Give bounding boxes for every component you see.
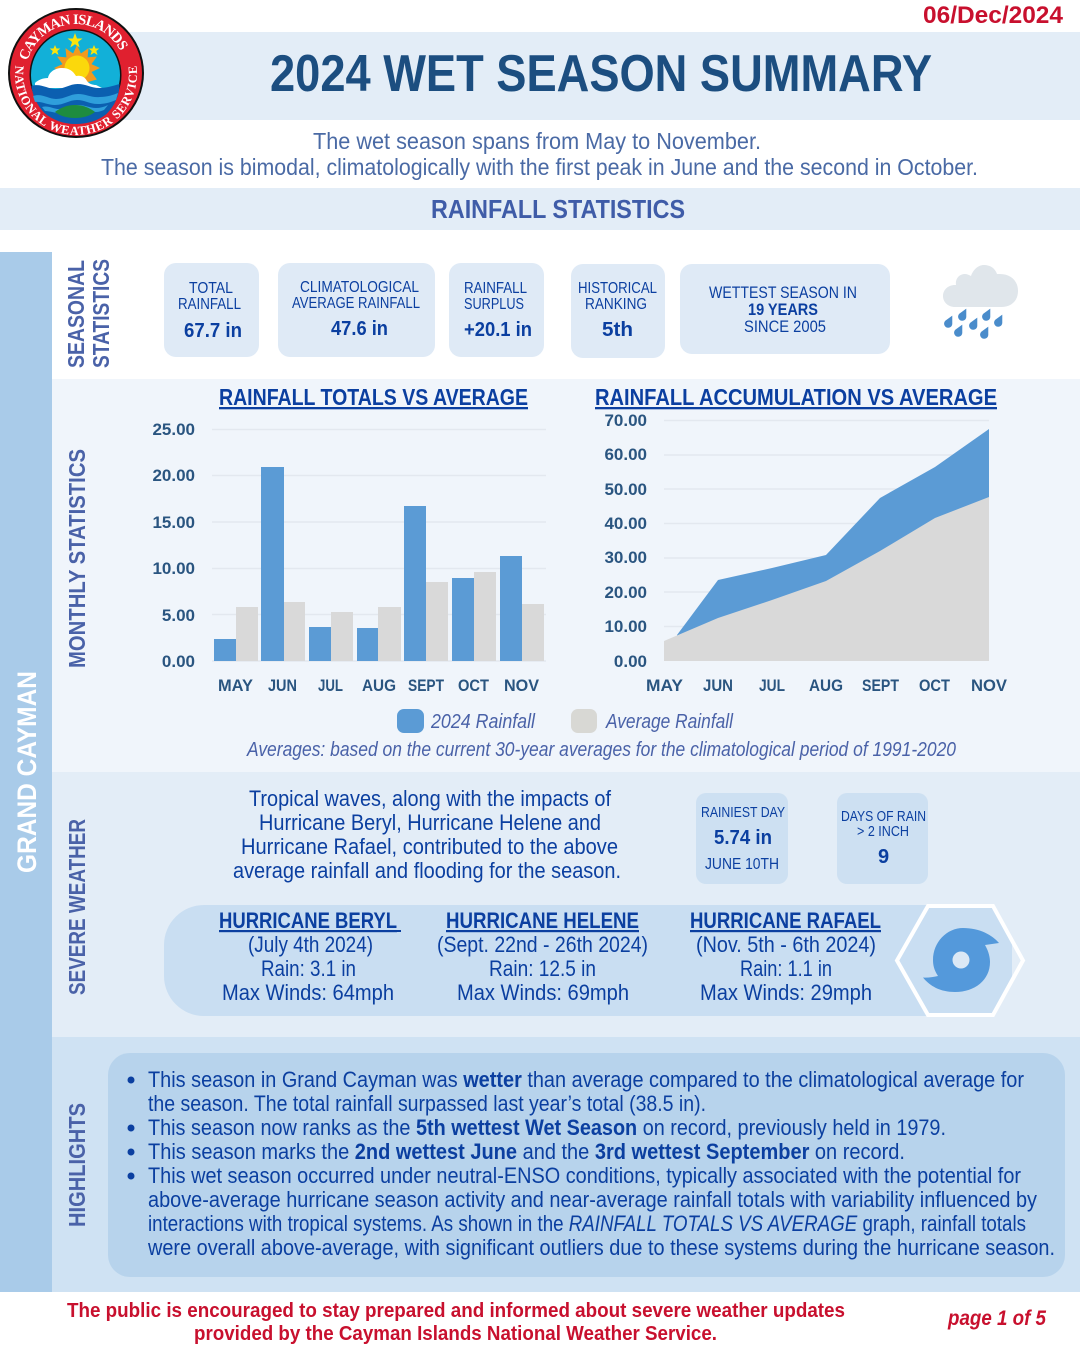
icon: national weather service logo: CAYMAN ISLANDS (20, 14, 128, 59)
severe weather description (233, 786, 621, 883)
card: days of rain: > 2 INCH (857, 824, 909, 840)
card: historical ranking: 5th (602, 319, 633, 341)
severe weather description: Tropical waves, along with the impacts of (249, 786, 612, 811)
sidebar: grand cayman (0, 252, 52, 1292)
severe weather description: Hurricane Beryl, Hurricane Helene and (259, 810, 601, 835)
highlight text: the season. The total rainfall surpassed last year’s total (38.5 in). (148, 1091, 706, 1116)
bar chart: rainfall totals vs average: AUG (362, 676, 396, 695)
area chart: rainfall accumulation vs average: 60.00 (604, 445, 647, 464)
sidebar: grand cayman: GRAND CAYMAN (12, 671, 42, 873)
card: rainiest day (696, 793, 788, 884)
card: climatological average: CLIMATOLOGICAL (300, 279, 419, 296)
hurricane helene: HURRICANE HELENE (446, 908, 639, 933)
hurricane rafael: HURRICANE RAFAEL (690, 908, 881, 933)
subtitle (101, 128, 978, 180)
hurricane beryl: (July 4th 2024) (248, 932, 373, 957)
card: days of rain: DAYS OF RAIN (841, 809, 926, 825)
legend: Average Rainfall (605, 711, 733, 733)
card: rainiest day: RAINIEST DAY (701, 805, 785, 821)
card: climatological average (278, 263, 435, 357)
hurricane rafael: Max Winds: 29mph (700, 980, 872, 1005)
icon: hurricane hexagon (897, 906, 1023, 1015)
card: wettest season: 19 YEARS (748, 300, 818, 319)
card: total rainfall: TOTAL (189, 280, 233, 297)
page number: page 1 of 5 (947, 1307, 1046, 1330)
bar chart: rainfall totals vs average: 15.00 (152, 513, 195, 532)
card: rainfall surplus: SURPLUS (464, 296, 524, 313)
area chart: rainfall accumulation vs average: 50.00 (604, 480, 647, 499)
date: 06/Dec/2024 (923, 2, 1064, 29)
heading band: rainfall statistics (0, 188, 1080, 230)
hurricane helene: (Sept. 22nd - 26th 2024) (437, 932, 648, 957)
bar chart: rainfall totals vs average: SEPT (408, 676, 444, 695)
bar chart: rainfall totals vs average: 5.00 (162, 606, 195, 625)
highlights label: HIGHLIGHTS (64, 1103, 90, 1227)
severe weather label: SEVERE WEATHER (64, 819, 90, 995)
area chart: rainfall accumulation vs average: NOV (971, 676, 1008, 695)
card: rainfall surplus: +20.1 in (464, 319, 532, 341)
panel: highlights (108, 1053, 1065, 1277)
card: total rainfall: 67.7 in (184, 320, 242, 342)
area chart: rainfall accumulation vs average: JUN (703, 676, 733, 695)
icon: national weather service logo (8, 8, 144, 138)
bar chart: rainfall totals vs average: JUN (268, 676, 297, 695)
header band (120, 32, 1080, 120)
bar chart: rainfall totals vs average: 25.00 (152, 420, 195, 439)
highlight text (147, 1067, 1055, 1260)
card: rainiest day: JUNE 10TH (705, 856, 779, 873)
hurricane rafael (690, 908, 881, 1005)
averages note: Averages: based on the current 30-year averages for the climatological period of 1991-2020 (246, 739, 956, 761)
title: 2024 WET SEASON SUMMARY (270, 45, 932, 103)
area chart: rainfall accumulation vs average: 30.00 (604, 548, 647, 567)
monthly statistics label: MONTHLY STATISTICS (64, 449, 90, 668)
area chart: rainfall accumulation vs average: OCT (919, 676, 951, 695)
highlight text: This season now ranks as the 5th wettest Wet Season on record, previously held in 1979. (148, 1115, 946, 1140)
highlight text: This season marks the 2nd wettest June and the 3rd wettest September on record. (148, 1139, 905, 1164)
highlight text: interactions with tropical systems. As shown in the RAINFALL TOTALS VS AVERAGE graph, rainfall totals (148, 1211, 1026, 1236)
card: rainiest day: 5.74 in (714, 827, 772, 849)
card: total rainfall: RAINFALL (178, 296, 241, 313)
severe weather description: Hurricane Rafael, contributed to the above (241, 834, 618, 859)
hurricane beryl: HURRICANE BERYL (219, 908, 397, 933)
subtitle: The wet season spans from May to November. (313, 128, 761, 154)
bar chart: rainfall totals vs average: OCT (458, 676, 490, 695)
footer message (67, 1299, 845, 1345)
area chart: rainfall accumulation vs average: MAY (646, 676, 684, 695)
area chart: rainfall accumulation vs average (595, 384, 1008, 695)
footer message: provided by the Cayman Islands National Weather Service. (194, 1322, 717, 1345)
footer message: The public is encouraged to stay prepared and informed about severe weather updates (67, 1299, 845, 1322)
area chart: rainfall accumulation vs average: 10.00 (604, 617, 647, 636)
card: historical ranking: HISTORICAL (578, 280, 657, 297)
card: wettest season: SINCE 2005 (744, 317, 826, 336)
area chart: rainfall accumulation vs average: 70.00 (604, 411, 647, 430)
card: wettest season: WETTEST SEASON IN (709, 283, 857, 302)
bar chart: rainfall totals vs average: 0.00 (162, 652, 195, 671)
panel backgrounds (52, 379, 1080, 772)
panel: seasonal statistics (63, 259, 1018, 368)
area chart: rainfall accumulation vs average: AUG (809, 676, 843, 695)
area chart: rainfall accumulation vs average: JUL (759, 676, 785, 695)
bar chart: rainfall totals vs average (152, 384, 546, 695)
bar chart: rainfall totals vs average: NOV (504, 676, 540, 695)
card: climatological average: AVERAGE RAINFALL (292, 295, 420, 312)
hurricane beryl: Rain: 3.1 in (261, 956, 356, 981)
card: days of rain (837, 793, 928, 884)
legend (397, 709, 733, 733)
card: wettest season (680, 264, 890, 354)
bar chart: rainfall totals vs average: 20.00 (152, 466, 195, 485)
chart title: RAINFALL ACCUMULATION VS AVERAGE (595, 384, 997, 410)
area chart: rainfall accumulation vs average: 40.00 (604, 514, 647, 533)
area chart: rainfall accumulation vs average: 20.00 (604, 583, 647, 602)
hurricane beryl (219, 908, 401, 1005)
card: historical ranking (571, 264, 665, 358)
seasonal label (63, 259, 114, 368)
highlight text: This season in Grand Cayman was wetter than average compared to the climatological average for (148, 1067, 1024, 1092)
card: rainfall surplus (449, 263, 544, 357)
hurricane helene (437, 908, 648, 1005)
bar chart: rainfall totals vs average: MAY (218, 676, 254, 695)
hurricane rafael: (Nov. 5th - 6th 2024) (696, 932, 876, 957)
card: total rainfall (164, 263, 259, 357)
hurricane helene: Rain: 12.5 in (489, 956, 596, 981)
card: days of rain: 9 (878, 846, 889, 868)
card: rainfall surplus: RAINFALL (464, 280, 527, 297)
hurricane beryl: Max Winds: 64mph (222, 980, 394, 1005)
heading band: rainfall statistics: RAINFALL STATISTICS (431, 194, 685, 224)
card: climatological average: 47.6 in (331, 318, 388, 340)
area chart: rainfall accumulation vs average: 0.00 (614, 652, 647, 671)
chart title: RAINFALL TOTALS VS AVERAGE (219, 384, 528, 410)
subtitle: The season is bimodal, climatologically with the first peak in June and the second in October. (101, 154, 978, 180)
seasonal label: STATISTICS (88, 259, 114, 368)
bar chart: rainfall totals vs average: 10.00 (152, 559, 195, 578)
card: historical ranking: RANKING (585, 296, 647, 313)
icon: rain cloud (943, 265, 1018, 339)
area chart: rainfall accumulation vs average: SEPT (862, 676, 900, 695)
hurricane rafael: Rain: 1.1 in (740, 956, 832, 981)
icon: national weather service logo: NATIONAL WEATHER SERVICE (14, 66, 138, 136)
severe weather description: average rainfall and flooding for the season. (233, 858, 621, 883)
panel: hurricanes (164, 905, 1023, 1016)
hurricane helene: Max Winds: 69mph (457, 980, 629, 1005)
seasonal label: SEASONAL (63, 260, 89, 368)
legend: 2024 Rainfall (430, 711, 535, 733)
bar chart: rainfall totals vs average: JUL (318, 676, 343, 695)
